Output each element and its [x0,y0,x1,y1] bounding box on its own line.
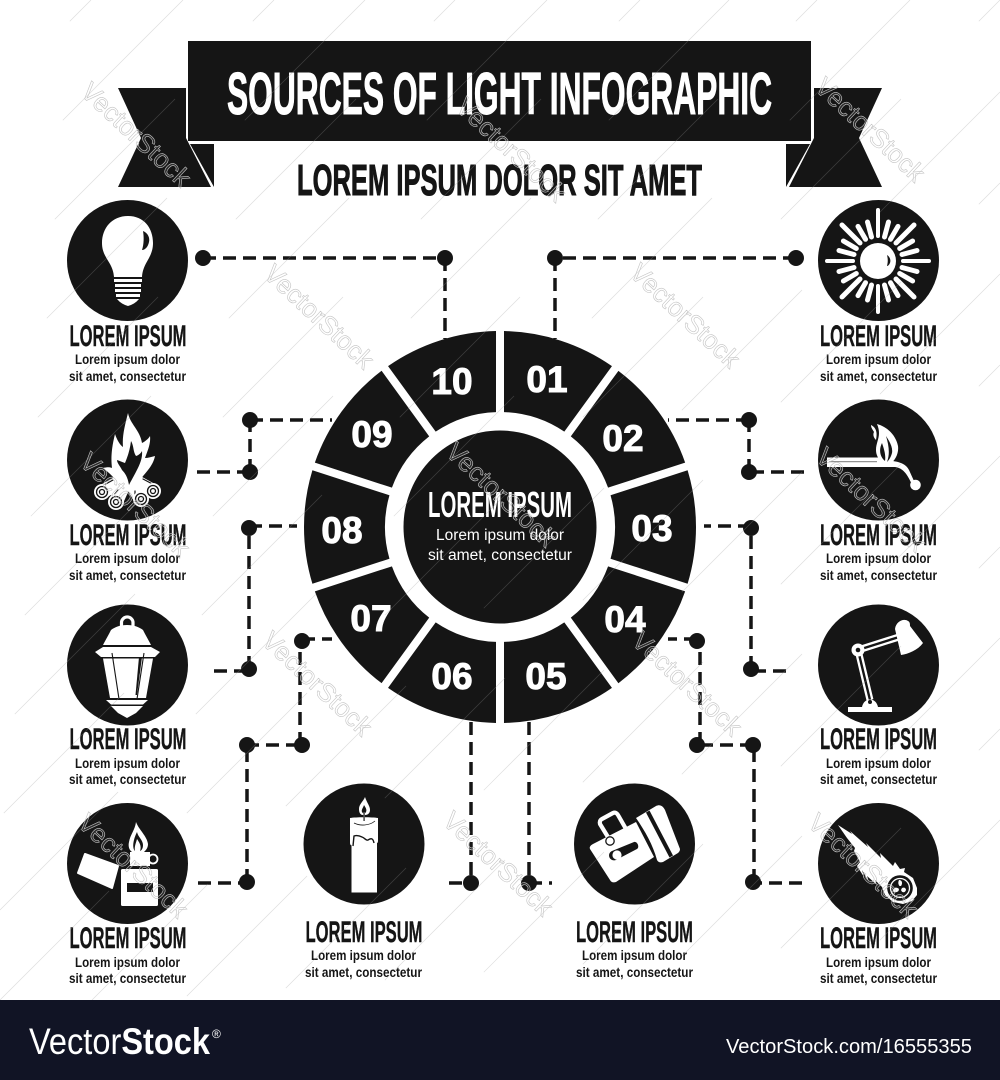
icon: lantern [67,604,188,726]
footer logo: VectorStock [29,1021,210,1062]
watermarks: VectorStock [72,807,195,924]
label heading: LOREM IPSUM [70,723,186,756]
ribbon left tail [118,88,214,187]
connector: flashlight to segment 05 [521,722,552,891]
label text [69,756,187,787]
icon: bulb [67,200,188,321]
registered mark: ® [212,1027,221,1041]
connector: bulb to segment 10 [195,250,453,339]
segment numbers: 02 [602,418,644,459]
center circle [404,430,596,624]
watermarks: VectorStock [75,76,198,193]
segment numbers: 10 [431,361,473,402]
label heading: LOREM IPSUM [306,916,422,949]
segment numbers: 05 [525,656,567,697]
icon: desk lamp [818,604,939,726]
segment numbers: 01 [526,359,568,400]
item: desk lamp [818,604,939,787]
label text [820,551,938,583]
item: campfire [67,400,188,583]
connector: sun to segment 01 [547,250,804,339]
label heading: LOREM IPSUM [70,320,186,353]
connector: candle to segment 06 [449,722,479,891]
label text: sit amet, consectetur [576,965,694,980]
watermarks: VectorStock [256,625,379,742]
watermarks: VectorStock [626,625,749,742]
label text [69,551,187,583]
label text [305,948,423,980]
label text: sit amet, consectetur [305,965,423,980]
label text [576,948,694,980]
connector: lighter to segment 07 [198,633,332,890]
ribbon right tail [786,88,882,187]
watermarks: VectorStock [624,257,747,374]
segment numbers: 03 [631,508,673,549]
icon: flashlight [574,784,695,904]
footer id: VectorStock.com/16555355 [726,1036,972,1058]
central wheel [279,303,721,751]
subtitle: LOREM IPSUM DOLOR SIT AMET [297,156,702,205]
label text: sit amet, consectetur [69,568,187,583]
label text: sit amet, consectetur [69,772,187,787]
center text: Lorem ipsum dolor [436,527,564,544]
label text: Lorem ipsum dolor [826,955,932,970]
label text [69,955,187,986]
wheel segments [279,303,721,751]
label text: sit amet, consectetur [820,971,938,986]
connector: lamp to segment 03 [704,520,786,677]
label text [69,352,187,384]
icon: fire [67,400,188,520]
label heading: LOREM IPSUM [70,922,186,955]
watermarks: VectorStock [802,807,925,924]
center heading: LOREM IPSUM [428,484,572,525]
label text: Lorem ipsum dolor [826,551,932,566]
item: sun [818,200,939,384]
icon: sun [818,200,939,321]
label text: sit amet, consectetur [820,369,938,384]
icon: lighter [67,803,188,924]
label text: sit amet, consectetur [69,971,187,986]
label text: Lorem ipsum dolor [75,352,181,367]
item: light bulb [67,200,188,384]
label text [820,352,938,384]
watermarks: VectorStock [437,805,560,922]
watermarks: VectorStock [450,91,573,208]
label text: Lorem ipsum dolor [75,756,181,771]
label text: sit amet, consectetur [69,369,187,384]
item: meteor [818,803,939,986]
watermarks: VectorStock [810,441,933,558]
label text [820,756,938,787]
label text: Lorem ipsum dolor [582,948,688,963]
label heading: LOREM IPSUM [576,916,693,949]
icon: candle [304,784,424,904]
watermarks: VectorStock [258,258,381,375]
item: lighter [67,803,188,986]
center text [428,527,572,564]
label text: Lorem ipsum dolor [75,551,181,566]
item: flashlight [574,784,695,980]
label text: Lorem ipsum dolor [826,756,932,771]
label heading: LOREM IPSUM [70,519,186,552]
label text: Lorem ipsum dolor [311,948,417,963]
icon: meteor [818,803,939,924]
connector: meteor to segment 04 [668,633,802,890]
watermarks: VectorStock [74,446,197,563]
footer bar [0,1000,1000,1080]
item: match [818,400,939,583]
segment numbers [321,359,673,697]
item: candle [304,784,424,980]
segment numbers: 06 [431,656,473,697]
label text [820,955,938,986]
ribbon main band [188,41,811,141]
label text: sit amet, consectetur [820,568,938,583]
label text: Lorem ipsum dolor [826,352,932,367]
watermarks [72,71,933,924]
segment numbers: 09 [351,414,393,455]
center text: sit amet, consectetur [428,547,572,564]
connector: match to segment 02 [668,412,804,480]
connector: lantern to segment 08 [214,520,297,677]
segment numbers: 08 [321,510,363,551]
title banner [118,41,882,187]
connector: fire to segment 09 [197,412,332,480]
label text: sit amet, consectetur [820,772,938,787]
item: lantern [67,604,188,787]
segment numbers: 07 [350,598,392,639]
icon: match [818,400,939,520]
segment numbers: 04 [604,599,646,640]
watermarks: VectorStock [809,71,932,188]
label text: Lorem ipsum dolor [75,955,181,970]
watermarks: VectorStock [440,436,563,553]
